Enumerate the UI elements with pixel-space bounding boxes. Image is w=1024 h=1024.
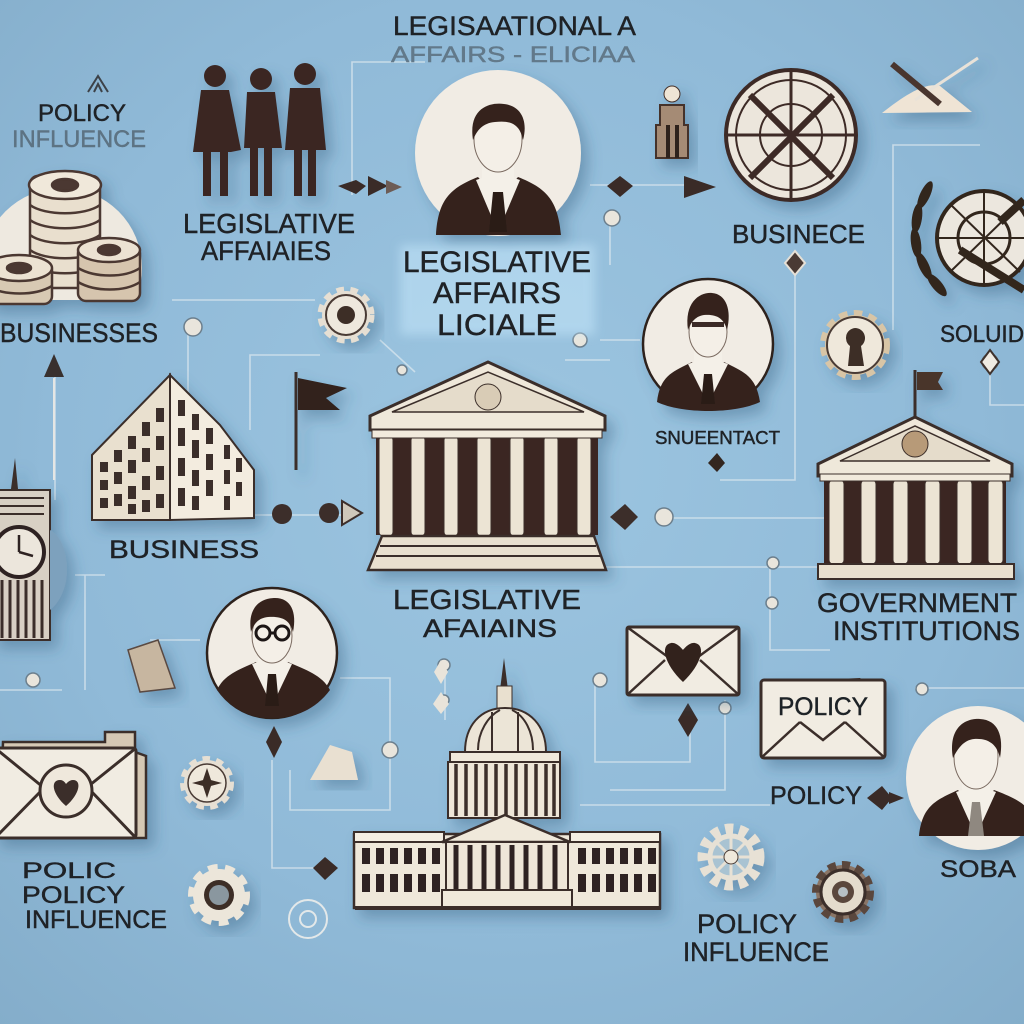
label: legislative affairs centre: LEGISLATIVE <box>403 246 591 279</box>
label: policy influence bottom right: INFLUENCE <box>683 937 829 967</box>
label: policy influence bottom left: INFLUENCE <box>25 906 167 934</box>
arrow: right vertical pin <box>785 251 805 275</box>
label: policy influence bottom left: POLICY <box>22 882 125 909</box>
icon: flag left <box>296 372 347 470</box>
label: legislative affairs left: AFFAIAIES <box>201 236 331 266</box>
icon: gear bottom left <box>193 869 245 921</box>
header text: AFFAIRS - ELICIAA <box>391 42 635 67</box>
portrait: lower left <box>207 588 337 718</box>
icon: gear with compass <box>184 760 230 806</box>
connector arrows right of courthouse <box>610 504 638 530</box>
icon: clock tower <box>0 458 67 640</box>
arrow: policy connector <box>867 786 904 810</box>
label: soba: SOBA <box>940 856 1016 883</box>
arrow: portrait left connector <box>338 176 402 196</box>
label: government institutions: GOVERNMENT <box>817 588 1017 618</box>
small decorative dots and nodes <box>26 210 998 758</box>
label: government institutions: INSTITUTIONS <box>833 616 1020 646</box>
label: legislative affairs centre <box>400 245 595 342</box>
label: businesses: BUSINESSES <box>0 318 158 348</box>
label: policy influence bottom left: POLIC <box>22 858 116 883</box>
icon: small figure <box>656 86 688 158</box>
capitol building <box>354 658 661 908</box>
connector lines <box>0 62 1024 868</box>
icon: gear left <box>322 291 370 339</box>
icon: laurel globe emblem <box>909 179 1024 299</box>
icon: three people <box>193 63 326 196</box>
icon: office building <box>92 375 254 520</box>
portrait: top centre <box>415 70 581 236</box>
icon: policy envelope: POLICY <box>778 693 868 721</box>
label: legislative affairs below courthouse: LEGISLATIVE <box>393 584 581 615</box>
icon: folder envelope left <box>0 732 146 838</box>
label: legislative affairs left: LEGISLATIVE <box>183 208 355 239</box>
label: legislative affairs left <box>183 208 355 266</box>
label: legislative affairs centre: AFFAIRS <box>433 277 561 310</box>
portrait: right centre <box>643 279 773 411</box>
label: policy influence bottom right: POLICY <box>697 909 797 939</box>
icon: gear cream <box>703 829 759 885</box>
icon: envelope with heart <box>627 627 739 695</box>
header text <box>391 11 636 67</box>
arrow: small pin right <box>981 350 999 374</box>
label: legislative affairs below courthouse: AFAIAINS <box>423 615 557 643</box>
icon: swirl seal <box>289 900 327 938</box>
label: statement: SNUEENTACT <box>655 428 780 448</box>
icon: stack of coins <box>0 171 142 348</box>
connector arrows left of courthouse <box>272 501 362 525</box>
label: policy influence bottom left <box>22 858 167 934</box>
header text: LEGISAATIONAL A <box>393 11 636 41</box>
arrow: small diamond under portrait <box>708 453 725 472</box>
label: policy influence bottom right <box>683 909 829 967</box>
icon: policy envelope <box>761 678 885 758</box>
arrow: left up pointer <box>44 354 64 480</box>
icon: torn paper centre <box>310 745 358 780</box>
policy influence label top left: INFLUENCE <box>12 126 146 153</box>
arrow: portrait right connector <box>607 176 716 198</box>
arrows around capitol <box>266 660 698 880</box>
icon: quill and paper <box>882 58 978 113</box>
main courthouse <box>368 362 606 570</box>
icon: gear bronze <box>816 865 870 919</box>
policy influence label top left: POLICY <box>38 100 126 127</box>
portrait: bottom right <box>906 706 1024 850</box>
icon: wheel emblem <box>726 70 856 200</box>
label: legislative affairs below courthouse <box>393 584 581 643</box>
policy influence label top left <box>12 76 146 153</box>
label: legislative affairs centre: LICIALE <box>437 309 557 342</box>
label: business mid left: BUSINESS <box>109 536 259 564</box>
label: policy right: POLICY <box>770 782 862 810</box>
label: business right: BUSINECE <box>732 219 865 249</box>
right courthouse <box>818 370 1014 579</box>
icon: gear with keyhole <box>825 315 885 375</box>
label: government institutions <box>817 588 1020 646</box>
icon: torn paper left <box>128 640 175 692</box>
